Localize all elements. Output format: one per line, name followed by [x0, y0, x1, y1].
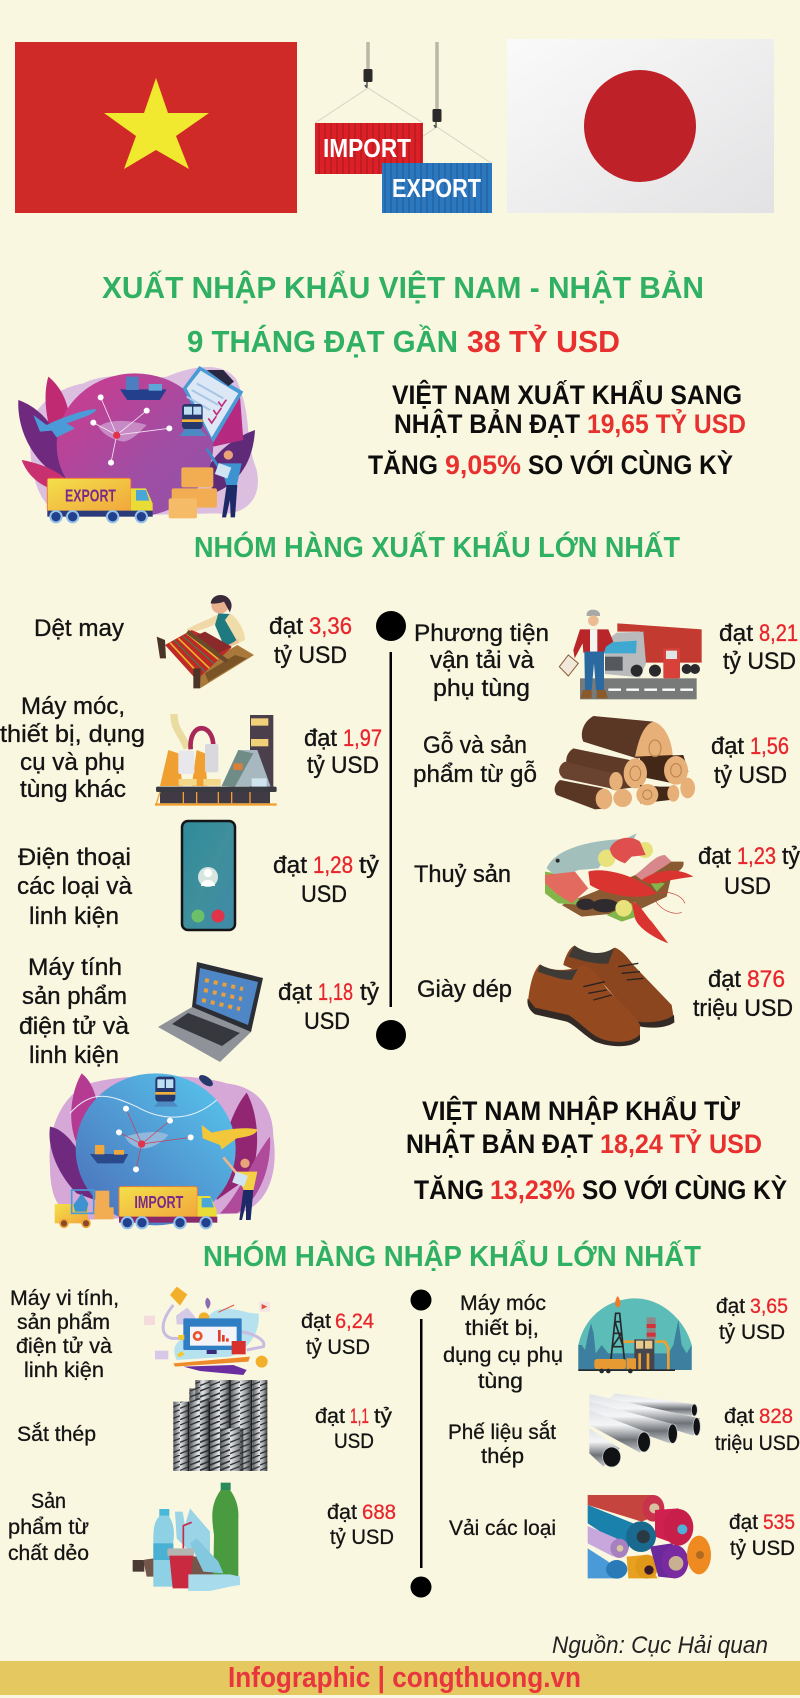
truck: EXPORT — [65, 485, 116, 505]
import summary text: 18,24 TỶ USD — [600, 1129, 762, 1159]
export item: machinery: 1,97 — [343, 725, 382, 752]
export item: vehicles — [414, 610, 798, 702]
import item: computers: linh kiện — [24, 1358, 104, 1382]
export item: vehicles: đạt — [719, 620, 753, 647]
export item: textiles: tỷ USD — [274, 642, 347, 669]
main title: 38 TỶ USD — [467, 324, 620, 359]
export item: computers: 1,18 — [318, 979, 353, 1006]
export item: footwear: triệu USD — [693, 995, 793, 1022]
export item: computers: điện tử và — [19, 1013, 130, 1040]
train — [179, 404, 207, 436]
import item: fabrics: đạt — [729, 1510, 758, 1534]
import item: machinery — [443, 1291, 788, 1393]
export item: computers: USD — [304, 1008, 350, 1035]
export item: vehicles: Phương tiện — [414, 620, 549, 647]
import export containers hanging on cranes: IMPORT — [323, 133, 411, 163]
clipboard — [183, 366, 243, 443]
import item: fabrics — [449, 1495, 795, 1579]
import item: plastics: 688 — [362, 1500, 396, 1524]
export item: vehicles: vận tải và — [430, 647, 535, 674]
import item: computers: sản phẩm — [17, 1310, 110, 1334]
import item: computers: Máy vi tính, — [10, 1286, 119, 1310]
main title — [102, 269, 704, 359]
import item: steel: USD — [334, 1429, 374, 1453]
import item: steel: 1,1 — [350, 1404, 369, 1428]
import item: machinery: dụng cụ phụ — [443, 1343, 563, 1367]
icon: smartphone — [182, 821, 235, 930]
forklift — [55, 1190, 114, 1227]
icon: steel rebar bundle — [173, 1380, 267, 1471]
export item: seafood: đạt — [698, 843, 731, 870]
export item: footwear: đạt — [708, 966, 741, 993]
truck: IMPORT — [134, 1192, 184, 1212]
import item: plastics: phẩm từ — [8, 1515, 89, 1539]
export item: textiles: Dệt may — [34, 615, 124, 642]
import item: scrap steel — [448, 1393, 800, 1468]
import item: fabrics: Vải các loại — [449, 1516, 556, 1540]
export summary text: VIỆT NAM XUẤT KHẨU SANG — [392, 380, 742, 410]
import item: scrap steel: Phế liệu sắt — [448, 1419, 556, 1444]
import summary text: 13,23% — [490, 1175, 575, 1205]
import item: plastics: chất dẻo — [8, 1541, 89, 1565]
export item: computers: linh kiện — [29, 1042, 119, 1069]
export item: wood: Gỗ và sản — [423, 732, 527, 759]
import summary text — [406, 1096, 787, 1205]
import item: computers — [10, 1286, 374, 1382]
export summary text: 19,65 TỶ USD — [587, 409, 746, 439]
export item: machinery: tùng khác — [20, 776, 126, 803]
export item: machinery: thiết bị, dụng — [0, 721, 145, 748]
import summary text: NHẬT BẢN ĐẠT — [406, 1129, 593, 1159]
export item: footwear: Giày dép — [417, 976, 512, 1003]
import item: computers: 6,24 — [335, 1309, 374, 1333]
export item: machinery: cụ và phụ — [20, 749, 125, 776]
icon: digital marketing computer — [144, 1287, 270, 1375]
import item: machinery: thiết bị, — [465, 1316, 539, 1340]
export item: vehicles: phụ tùng — [433, 675, 530, 702]
export item: computers: tỷ — [360, 979, 379, 1006]
icon: oil derrick — [578, 1296, 692, 1373]
export illustration: globe, plane, ship, truck — [18, 366, 258, 522]
import item: machinery: đạt — [716, 1294, 745, 1318]
export item: vehicles: tỷ USD — [723, 648, 796, 675]
export item: wood — [413, 716, 789, 809]
icon: plastic bottles and cup — [133, 1483, 240, 1591]
import export containers hanging on cranes — [315, 42, 492, 213]
import item: steel: tỷ — [374, 1404, 392, 1428]
import item: machinery: Máy móc — [460, 1291, 546, 1315]
icon: weaver at loom — [157, 595, 254, 688]
export item: phones: linh kiện — [29, 903, 119, 930]
export item: computers: đạt — [278, 979, 312, 1006]
rocket — [197, 1073, 215, 1089]
export item: footwear — [417, 946, 793, 1046]
airplane — [33, 409, 97, 437]
import illustration: globe, plane, ship, truck — [49, 1073, 275, 1228]
export item: wood: đạt — [711, 733, 744, 760]
footer bar: Infographic | congthuong.vn — [228, 1662, 581, 1694]
export item: phones: 1,28 — [313, 852, 353, 879]
import item: scrap steel: 828 — [759, 1404, 793, 1428]
main title: 9 THÁNG ĐẠT GẦN — [187, 324, 458, 359]
import item: plastics — [8, 1483, 396, 1591]
icon: fabric rolls — [588, 1495, 711, 1579]
icon: factory line — [155, 714, 277, 806]
export item: computers: Máy tính — [28, 954, 122, 981]
export item: wood: tỷ USD — [714, 762, 787, 789]
import item: plastics: Sản — [31, 1489, 66, 1513]
main title: XUẤT NHẬP KHẨU VIỆT NAM - NHẬT BẢN — [102, 269, 704, 305]
truck — [47, 478, 153, 522]
Vietnam flag — [15, 42, 297, 213]
import summary text: SO VỚI CÙNG KỲ — [582, 1175, 787, 1205]
import item: fabrics: 535 — [763, 1510, 795, 1534]
icon: driver and truck — [559, 610, 702, 699]
icon: leather shoes — [527, 946, 674, 1046]
export item: phones: Điện thoại — [18, 844, 131, 871]
footer bar — [0, 1661, 800, 1695]
export summary text: SO VỚI CÙNG KỲ — [528, 450, 733, 480]
import item: fabrics: tỷ USD — [730, 1536, 795, 1560]
export item: wood: 1,56 — [750, 733, 789, 760]
export item: machinery — [0, 693, 382, 806]
export item: textiles — [34, 595, 352, 688]
export item: seafood: USD — [724, 873, 771, 900]
boxes — [169, 467, 217, 518]
import item: scrap steel: đạt — [724, 1404, 754, 1428]
icon: seafood platter — [545, 833, 693, 943]
export item: computers: sản phẩm — [22, 983, 127, 1010]
export summary text: TĂNG — [368, 450, 438, 480]
export item: phones: tỷ — [359, 852, 379, 879]
export item: seafood: Thuỷ sản — [414, 861, 511, 888]
import section heading: NHÓM HÀNG NHẬP KHẨU LỚN NHẤT — [203, 1239, 701, 1273]
source note: Nguồn: Cục Hải quan — [552, 1632, 768, 1659]
import item: computers: tỷ USD — [306, 1335, 370, 1359]
export item: computers — [19, 954, 379, 1069]
export item: seafood: 1,23 — [737, 843, 776, 870]
airplane — [202, 1125, 257, 1149]
import timeline divider — [410, 1290, 432, 1598]
export item: machinery: tỷ USD — [307, 752, 379, 779]
export item: textiles: 3,36 — [309, 613, 352, 640]
export item: phones: đạt — [273, 852, 307, 879]
Japan flag — [507, 39, 774, 213]
export item: phones: USD — [301, 881, 347, 908]
import item: steel — [17, 1380, 392, 1471]
export item: machinery: đạt — [304, 725, 337, 752]
export item: machinery: Máy móc, — [21, 693, 125, 720]
export summary text: NHẬT BẢN ĐẠT — [394, 409, 580, 439]
ship — [90, 1145, 128, 1163]
header: flags and containers — [15, 39, 774, 213]
worker — [223, 1157, 257, 1220]
import summary text: TĂNG — [414, 1175, 484, 1205]
export section heading: NHÓM HÀNG XUẤT KHẨU LỚN NHẤT — [194, 530, 680, 564]
export timeline divider — [376, 611, 406, 1050]
export summary text — [368, 380, 746, 480]
ship — [120, 377, 167, 400]
truck — [119, 1187, 217, 1228]
import item: machinery: 3,65 — [750, 1294, 788, 1318]
export summary text: 9,05% — [445, 450, 521, 480]
import export containers hanging on cranes: EXPORT — [392, 173, 481, 203]
import item: machinery: tùng — [478, 1369, 523, 1393]
icon: laptop — [158, 962, 263, 1062]
import item: steel: Sắt thép — [17, 1421, 96, 1446]
export item: phones — [17, 821, 379, 930]
icon: steel pipes — [589, 1393, 700, 1467]
import item: plastics: tỷ USD — [330, 1525, 394, 1549]
train — [154, 1077, 178, 1107]
import item: plastics: đạt — [327, 1500, 357, 1524]
export item: footwear: 876 — [747, 966, 785, 993]
import item: machinery: tỷ USD — [719, 1320, 785, 1344]
import summary text: VIỆT NAM NHẬP KHẨU TỪ — [422, 1096, 740, 1126]
icon: log pile — [555, 716, 695, 809]
import item: scrap steel: thép — [481, 1444, 524, 1468]
export item: seafood — [414, 833, 800, 943]
export item: wood: phẩm từ gỗ — [413, 761, 537, 788]
export item: phones: các loại và — [17, 873, 133, 900]
import item: steel: đạt — [315, 1404, 345, 1428]
import item: computers: đạt — [301, 1309, 331, 1333]
worker — [207, 449, 242, 517]
export item: textiles: đạt — [269, 613, 303, 640]
import item: computers: điện tử và — [16, 1334, 112, 1358]
